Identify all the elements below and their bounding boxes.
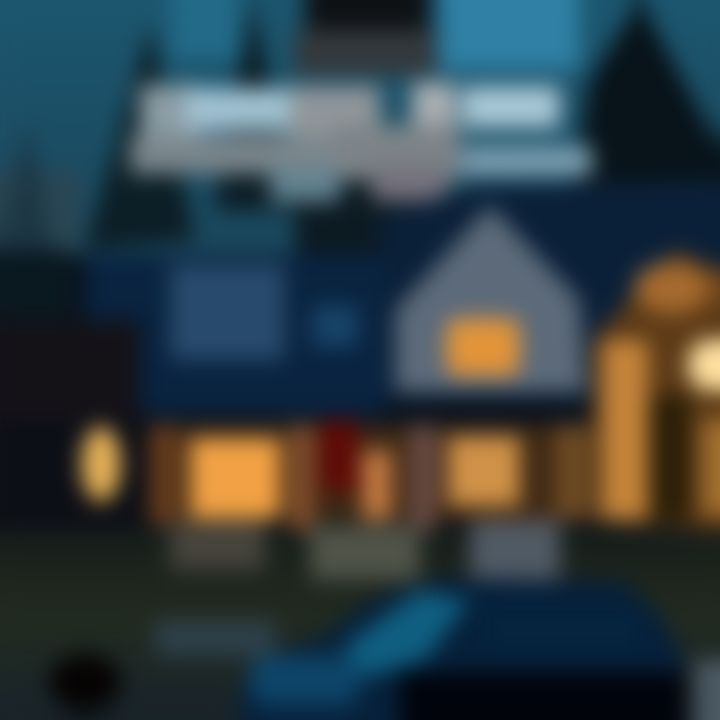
house: grey gable with lit window — [395, 205, 585, 392]
house: glowing right wing — [592, 250, 720, 530]
house: roof and upper storey — [0, 180, 720, 555]
trees: dark silhouettes — [0, 0, 720, 280]
headline: illegible blurred title block — [130, 82, 592, 202]
background: sky — [0, 0, 720, 300]
car: dark blue vehicle — [240, 578, 685, 720]
lawn — [0, 520, 720, 720]
porch: lower storey with lit windows — [0, 420, 590, 550]
